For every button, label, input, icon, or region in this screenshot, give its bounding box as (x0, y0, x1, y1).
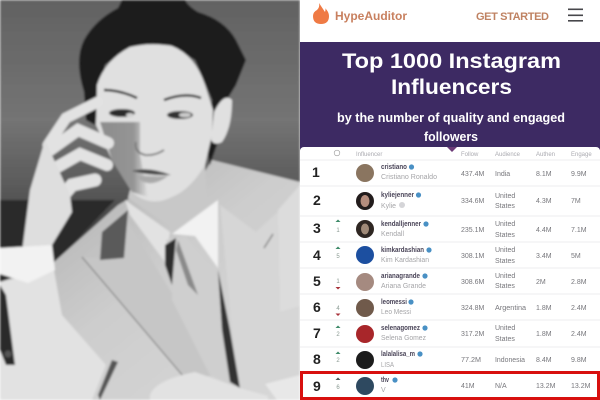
row 2: States (495, 203, 515, 210)
nose and mouth (136, 142, 164, 155)
row 7: States (495, 336, 515, 343)
row 4: 308.1M (461, 253, 485, 260)
row 4: 4 (313, 247, 321, 263)
get started link: GET STARTED (476, 11, 549, 23)
row 5: United (495, 273, 515, 280)
row 8: lalalalisa_m (381, 351, 415, 358)
row 5: Ariana Grande (381, 283, 426, 290)
row 8: 9.8M (571, 357, 587, 364)
row 1: Cristiano Ronaldo (381, 174, 437, 181)
row 2: 2 (313, 192, 321, 208)
row 5: 1 (336, 279, 340, 285)
subtitle: by the number of quality and engaged (337, 111, 565, 125)
row 7: Selena Gomez (381, 335, 426, 342)
row 3: United (495, 221, 515, 228)
row 2: 334.6M (461, 198, 485, 205)
row 7: 317.2M (461, 331, 485, 338)
row 7: 7 (313, 325, 321, 341)
row 6: leomessi (381, 299, 407, 306)
row 7: selenagomez (381, 325, 420, 332)
left eye (109, 109, 135, 117)
row 3: 4.4M (536, 227, 552, 234)
row 6 (313, 299, 587, 317)
row 4: 3.4M (536, 253, 552, 260)
table header (334, 150, 592, 158)
row 9: highlighted: 9 (313, 378, 321, 394)
row 9: highlighted: V (381, 387, 386, 394)
row 6: Leo Messi (381, 309, 411, 316)
ranking table (300, 147, 600, 400)
left lapel (82, 222, 226, 376)
shirt collar (125, 200, 170, 262)
row 3: States (495, 232, 515, 239)
row 7: 1.8M (536, 331, 552, 338)
row 8: 77.2M (461, 357, 481, 364)
row 4: Kim Kardashian (381, 257, 429, 264)
row 3: 235.1M (461, 227, 485, 234)
lower hand (150, 372, 268, 400)
row 1: cristiano (381, 164, 407, 171)
row 5: 5 (313, 273, 321, 289)
table header: Engage (571, 152, 592, 158)
row 2: 4.3M (536, 198, 552, 205)
row 6: Argentina (495, 305, 526, 312)
row 8: 8 (313, 351, 321, 367)
neck (128, 165, 207, 228)
row 4: kimkardashian (381, 247, 424, 254)
row 9: highlighted: 13.2M (536, 383, 556, 390)
table header: Authen (536, 152, 555, 158)
table header: Follow (461, 152, 479, 158)
row 4 (313, 246, 581, 265)
row 3: kendalljenner (381, 221, 421, 228)
row 5: 2.8M (571, 279, 587, 286)
row 6: 2.4M (571, 305, 587, 312)
row 1: 1 (312, 164, 320, 180)
row 6: 6 (313, 299, 321, 315)
photo: portrait of man in light suit (0, 0, 300, 400)
row 4: States (495, 258, 515, 265)
row 5: 308.6M (461, 279, 485, 286)
row 1 (312, 164, 587, 182)
row 4: United (495, 247, 515, 254)
row 6: 4 (336, 306, 340, 312)
table header: Influencer (356, 152, 382, 158)
row 2 (313, 192, 581, 210)
row 8: 2 (336, 358, 340, 364)
title: Top 1000 Instagram (342, 50, 561, 73)
ear (211, 98, 232, 144)
row 5 (313, 273, 587, 291)
row 1: 8.1M (536, 171, 552, 178)
header bar (300, 0, 600, 42)
left brow (104, 90, 137, 98)
row 1: 9.9M (571, 171, 587, 178)
row 4: 5 (336, 254, 340, 260)
row 9: highlighted: 41M (461, 383, 475, 390)
right brow (164, 95, 201, 100)
icon: hamburger menu (568, 8, 583, 22)
row 5: arianagrande (381, 273, 420, 280)
row 1: 437.4M (461, 171, 485, 178)
row 9: highlighted: 13.2M (571, 383, 591, 390)
row 7: 2 (336, 332, 340, 338)
row 2: kyliejenner (381, 192, 414, 199)
row 8: LISA (381, 362, 394, 369)
right eye (167, 111, 193, 119)
row 9: highlighted: 6 (336, 385, 340, 391)
icon: HypeAuditor flame (313, 3, 329, 24)
left sleeve (0, 270, 106, 400)
table header: Audience (495, 152, 521, 158)
purple title banner: Influencers (391, 76, 512, 99)
row 9: highlighted: N/A (495, 383, 507, 390)
row 5: 2M (536, 279, 546, 286)
hand (48, 102, 108, 205)
row 6: 1.8M (536, 305, 552, 312)
row 8: 8.4M (536, 357, 552, 364)
row 3: 7.1M (571, 227, 587, 234)
row 8 (313, 351, 587, 369)
face (96, 44, 213, 201)
purple title banner: followers (424, 130, 478, 144)
row 6: 324.8M (461, 305, 485, 312)
row 9: highlighted: thv (381, 377, 389, 384)
row 4: 5M (571, 253, 581, 260)
row 2: United (495, 193, 515, 200)
right jacket (220, 190, 300, 400)
row 2: 7M (571, 198, 581, 205)
tie (166, 236, 235, 387)
row 5: States (495, 283, 515, 290)
row 7: 2.4M (571, 331, 587, 338)
row 2: Kylie (381, 203, 396, 210)
jacket (0, 160, 300, 400)
row 9: highlighted (313, 377, 591, 395)
row 8: Indonesia (495, 357, 525, 364)
hair (79, 0, 246, 165)
logo wordmark: HypeAuditor (335, 9, 407, 23)
lapel shadow (100, 210, 128, 260)
row 7: United (495, 325, 515, 332)
row 1: India (495, 171, 510, 178)
purple title banner (300, 42, 600, 150)
row 3: Kendall (381, 231, 404, 238)
cheek shadow (100, 122, 148, 197)
row 3: 3 (313, 220, 321, 236)
row 3 (313, 220, 587, 239)
row 7 (313, 325, 587, 343)
row 3: 1 (336, 228, 340, 234)
red highlight frame (302, 372, 598, 398)
